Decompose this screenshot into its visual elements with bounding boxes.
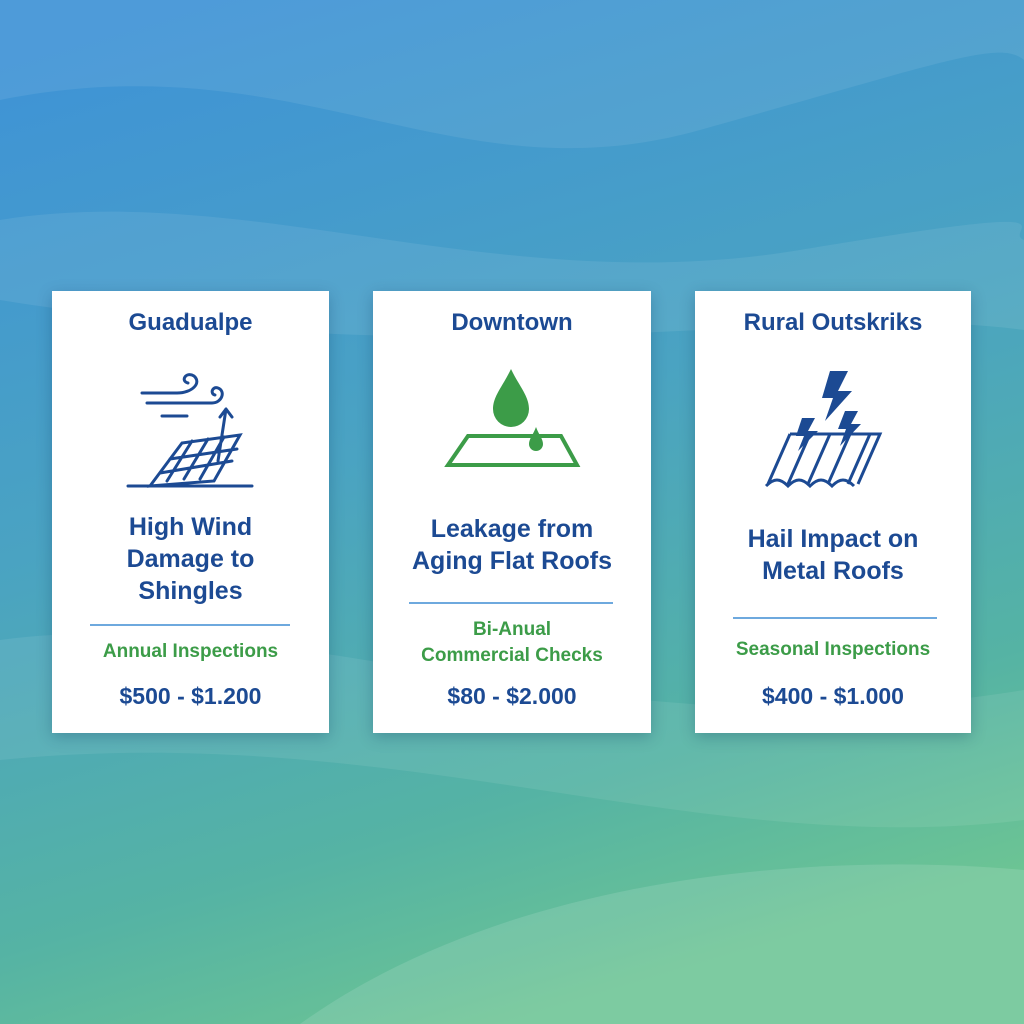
icon: wind and shingles (126, 373, 254, 488)
price: $80 - $2.000 (447, 683, 577, 709)
inspection type: Annual Inspections (103, 641, 278, 662)
inspection type (421, 619, 603, 666)
inspection type: Seasonal Inspections (736, 639, 930, 660)
title text: Damage to (127, 545, 254, 573)
heading: Rural Outskriks (744, 309, 922, 336)
title text: High Wind (129, 513, 252, 541)
title text: Shingles (138, 577, 243, 605)
price: $500 - $1.200 (120, 683, 261, 709)
title text: Leakage from (431, 515, 593, 543)
title text (127, 513, 254, 605)
heading: Downtown (451, 309, 573, 336)
title text (412, 515, 612, 575)
inspection type: Bi-Anual (473, 619, 551, 640)
panel: Rural Outskriks (695, 291, 971, 733)
title text: Hail Impact on (748, 525, 918, 553)
price: $400 - $1.000 (762, 683, 904, 709)
inspection type: Commercial Checks (421, 645, 603, 666)
panel: Downtown (373, 291, 651, 733)
title text: Aging Flat Roofs (412, 547, 612, 575)
icon: hail on metal roof (765, 371, 882, 488)
title text: Metal Roofs (762, 557, 904, 585)
icon: water drop on flat roof (444, 369, 580, 467)
title text (748, 525, 918, 585)
panel: Guadualpe (52, 291, 329, 733)
heading: Guadualpe (128, 309, 253, 336)
